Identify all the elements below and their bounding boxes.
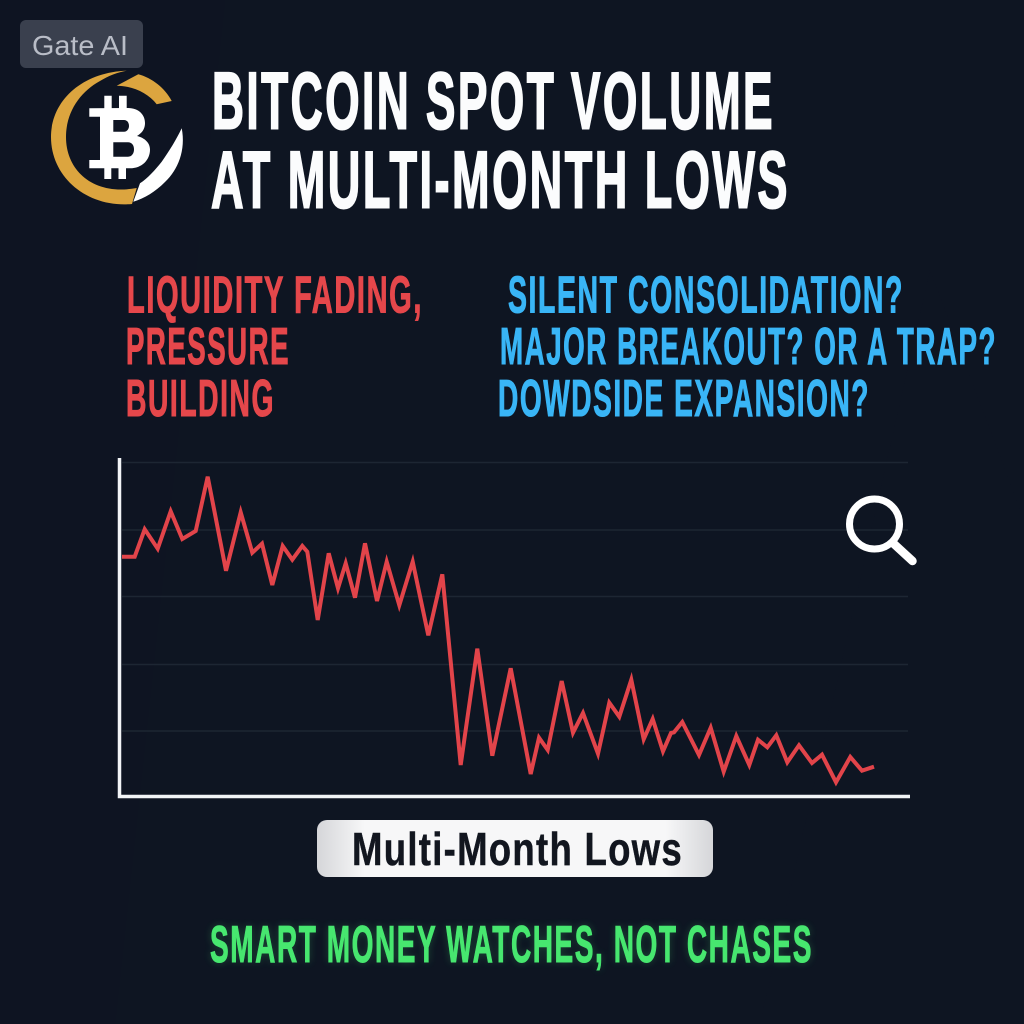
icon: bitcoin logo bbox=[51, 71, 183, 204]
text block: liquidity warning: PRESSURE bbox=[126, 318, 290, 376]
badge: Gate AI: Gate AI bbox=[32, 30, 128, 61]
text block: liquidity warning bbox=[126, 266, 423, 428]
text block: market questions bbox=[498, 266, 997, 428]
label: Multi-Month Lows: Multi-Month Lows bbox=[352, 823, 683, 875]
title bbox=[211, 56, 790, 226]
line chart: spot volume bbox=[120, 458, 910, 796]
icon: magnifying glass bbox=[850, 499, 912, 561]
text block: liquidity warning: BUILDING bbox=[126, 370, 275, 428]
badge: Gate AI bbox=[20, 20, 143, 68]
text block: liquidity warning: LIQUIDITY FADING, bbox=[127, 266, 423, 324]
